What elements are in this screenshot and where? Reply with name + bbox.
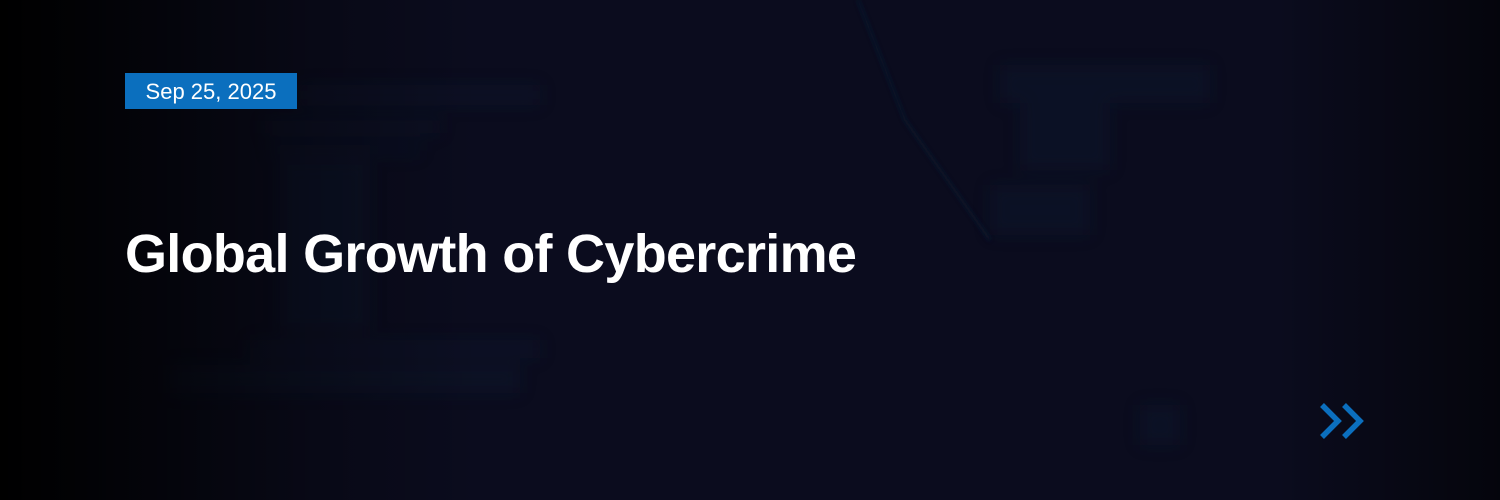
date badge: Sep 25, 2025 (146, 79, 276, 104)
icon: double chevron arrow (1320, 403, 1364, 439)
title: Global Growth of Cybercrime (125, 224, 856, 284)
date badge (125, 73, 297, 109)
